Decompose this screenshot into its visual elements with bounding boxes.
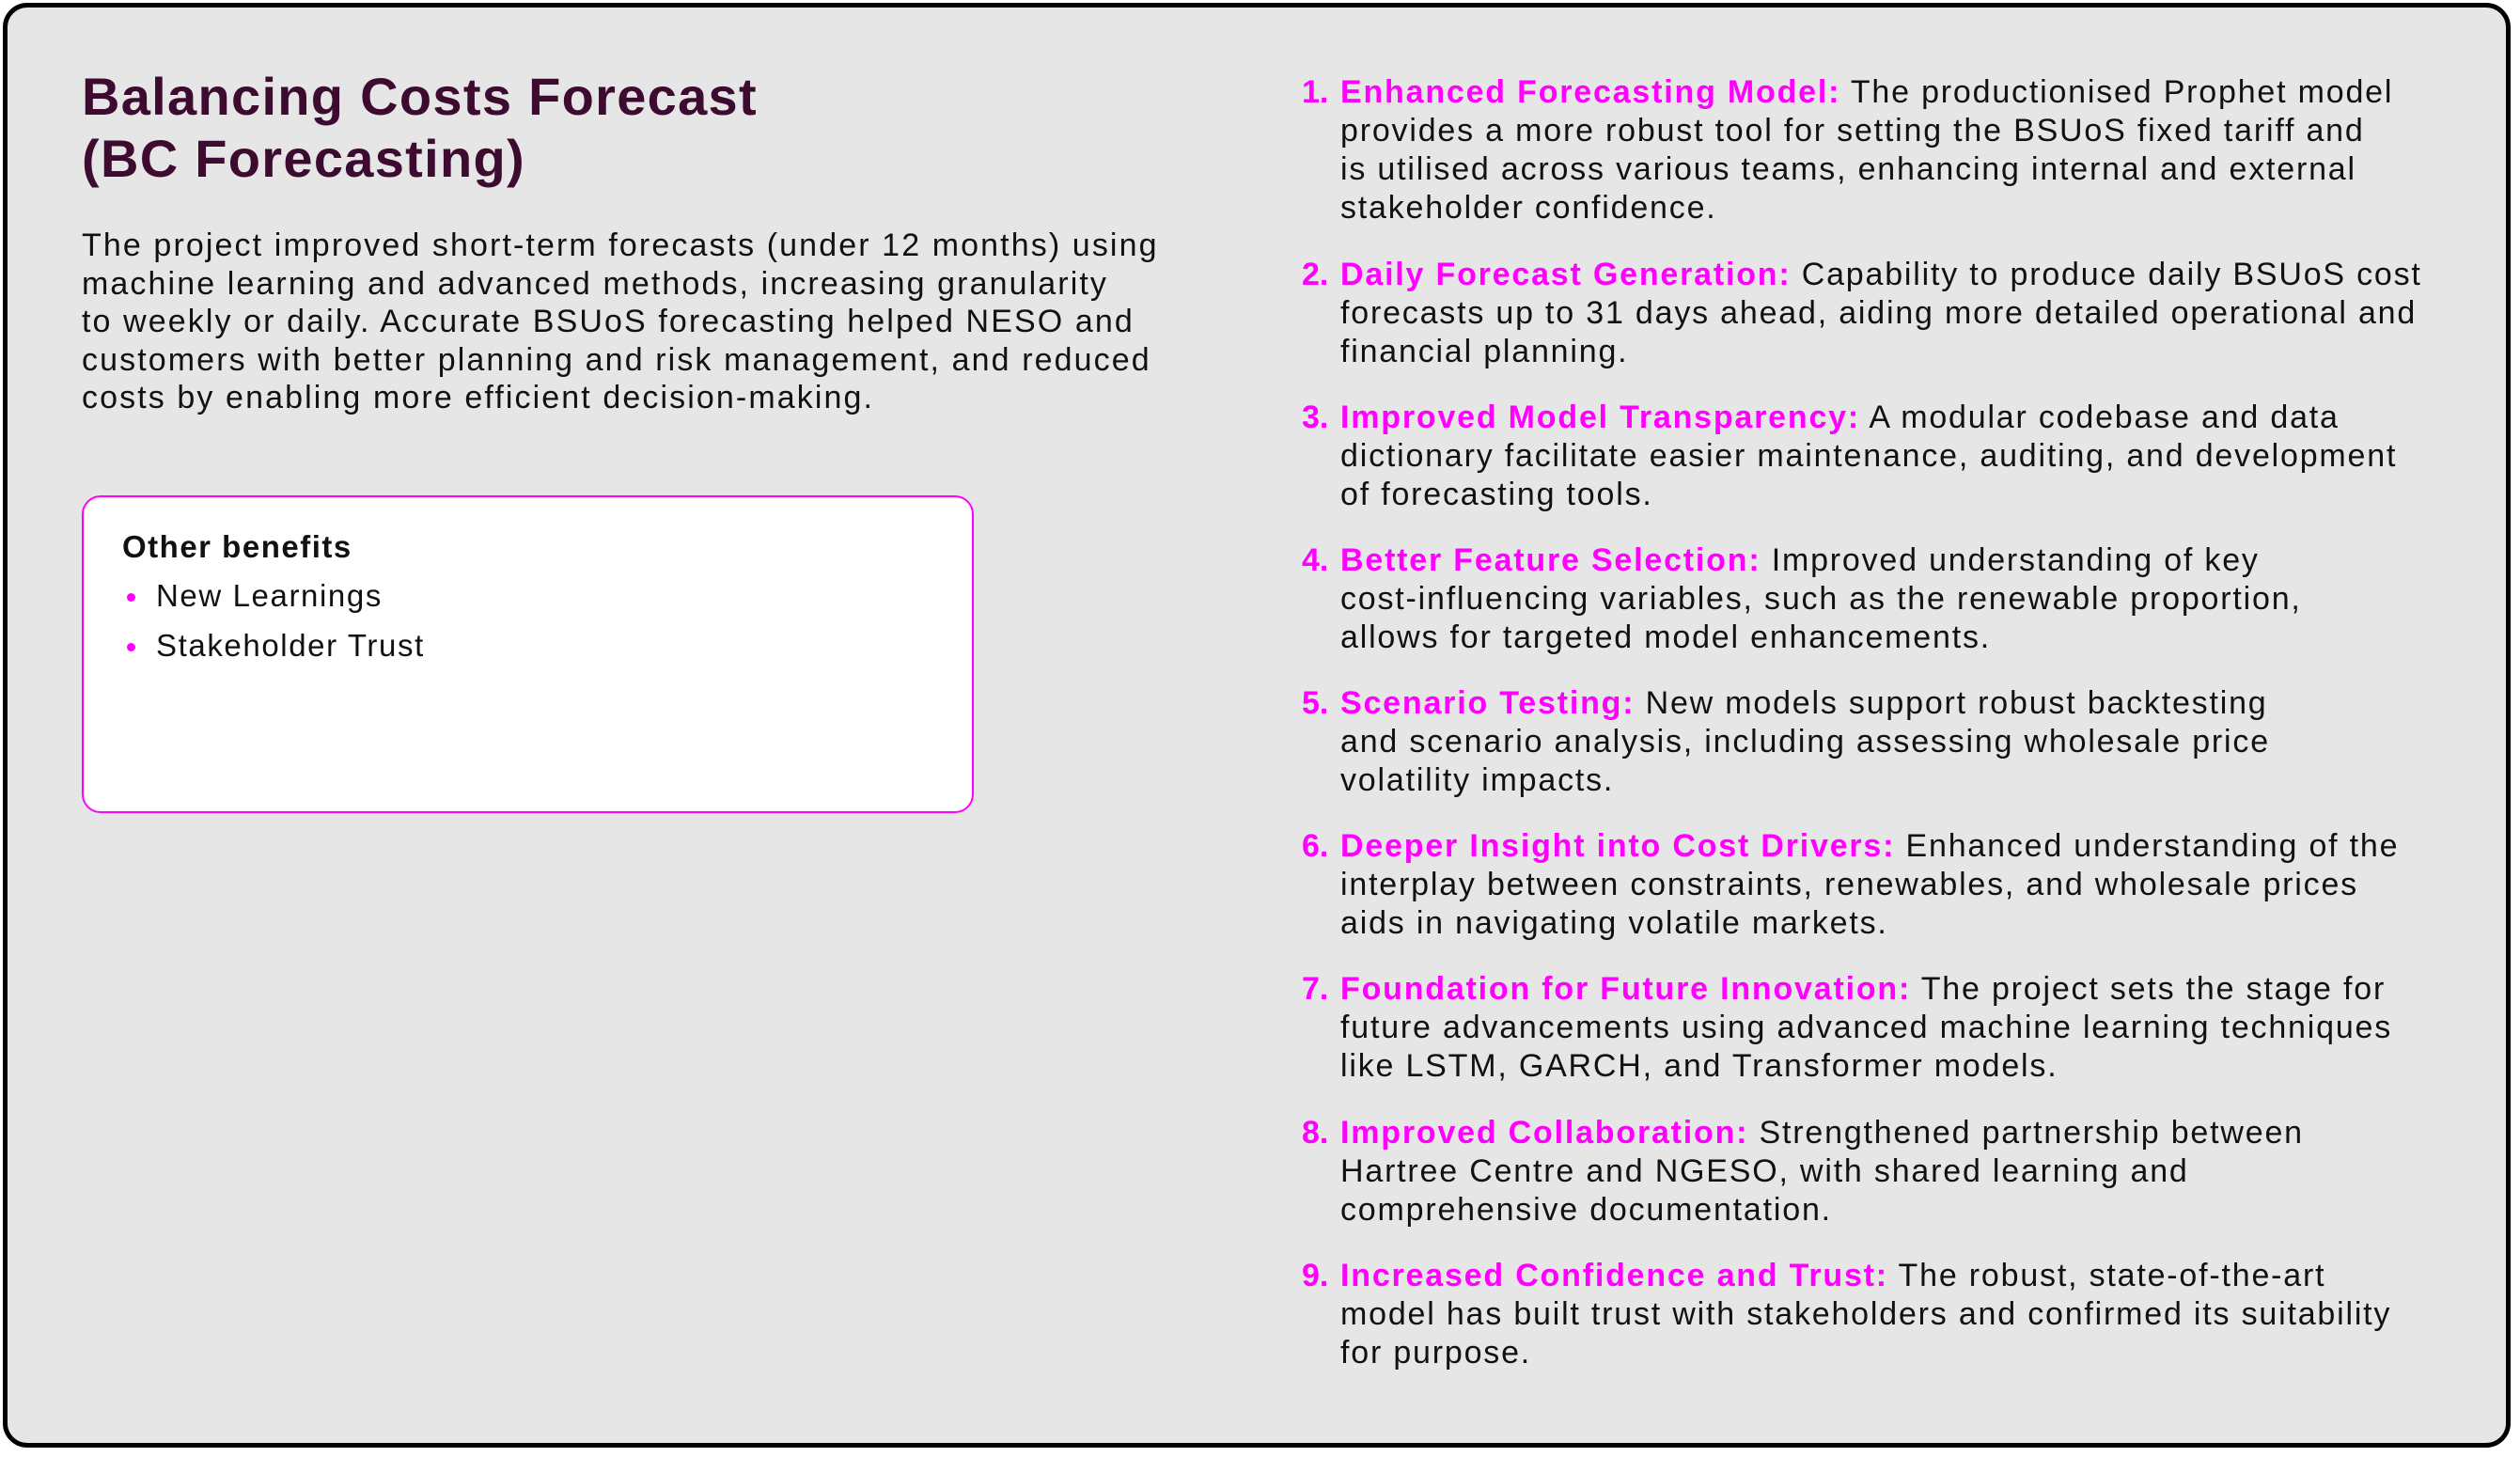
text: is utilised across various teams, enhancing internal and external — [1340, 151, 2356, 187]
text: Better Feature Selection: Improved understanding of key — [1340, 542, 2260, 578]
text: 9. — [1302, 1258, 1328, 1293]
text: 8. — [1302, 1115, 1328, 1151]
text: 1. — [1302, 74, 1328, 110]
text: Foundation for Future Innovation: The project sets the stage for — [1340, 971, 2386, 1007]
text: interplay between constraints, renewables, and wholesale prices — [1340, 867, 2358, 902]
text: forecasts up to 31 days ahead, aiding more detailed operational and — [1340, 295, 2417, 331]
text: 2. — [1302, 257, 1328, 292]
title — [82, 67, 758, 188]
text: 7. — [1302, 971, 1328, 1007]
text: future advancements using advanced machine learning techniques — [1340, 1010, 2392, 1045]
text: aids in navigating volatile markets. — [1340, 905, 1888, 941]
text: Daily Forecast Generation: Capability to produce daily BSUoS cost — [1340, 257, 2422, 292]
text: like LSTM, GARCH, and Transformer models. — [1340, 1048, 2058, 1084]
list item 3 — [1302, 400, 2397, 512]
heading: other benefits: Other benefits — [122, 529, 352, 564]
text: Scenario Testing: New models support robust backtesting — [1340, 685, 2268, 721]
text block: intro: to weekly or daily. Accurate BSUoS forecasting helped NESO and — [82, 304, 1135, 339]
bullet: new learnings: New Learnings — [156, 578, 383, 613]
list item 4 — [1302, 542, 2302, 655]
text: cost-influencing variables, such as the renewable proportion, — [1340, 581, 2302, 617]
text: 4. — [1302, 542, 1328, 578]
text: and scenario analysis, including assessing wholesale price — [1340, 724, 2270, 760]
text: volatility impacts. — [1340, 762, 1614, 798]
bullet: stakeholder trust: Stakeholder Trust — [156, 628, 425, 663]
text: comprehensive documentation. — [1340, 1192, 1832, 1228]
list item 5 — [1302, 685, 2270, 798]
text block: intro: customers with better planning and risk management, and reduced — [82, 342, 1151, 378]
list item 6 — [1302, 828, 2399, 941]
text: for purpose. — [1340, 1335, 1531, 1371]
text block: intro: The project improved short-term forecasts (under 12 months) using — [82, 227, 1159, 263]
panel: other benefits — [82, 495, 974, 813]
title: (BC Forecasting) — [82, 129, 525, 188]
text block: intro: costs by enabling more efficient decision-making. — [82, 380, 874, 415]
text: dictionary facilitate easier maintenance, auditing, and development — [1340, 438, 2397, 474]
text block: intro — [82, 227, 1159, 415]
text: provides a more robust tool for setting the BSUoS fixed tariff and — [1340, 113, 2365, 149]
text: Improved Collaboration: Strengthened partnership between — [1340, 1115, 2304, 1151]
text: of forecasting tools. — [1340, 477, 1653, 512]
list item 2 — [1302, 257, 2422, 369]
text: model has built trust with stakeholders and confirmed its suitability — [1340, 1296, 2391, 1332]
text: allows for targeted model enhancements. — [1340, 619, 1991, 655]
text: 6. — [1302, 828, 1328, 864]
text: Hartree Centre and NGESO, with shared learning and — [1340, 1153, 2189, 1189]
list item 9 — [1302, 1258, 2391, 1371]
text: Increased Confidence and Trust: The robust, state-of-the-art — [1340, 1258, 2325, 1293]
text: financial planning. — [1340, 334, 1628, 369]
text: Deeper Insight into Cost Drivers: Enhanced understanding of the — [1340, 828, 2399, 864]
text: stakeholder confidence. — [1340, 190, 1717, 226]
title: Balancing Costs Forecast — [82, 67, 758, 126]
list item 1 — [1302, 74, 2393, 226]
text: 3. — [1302, 400, 1328, 435]
text: Improved Model Transparency: A modular codebase and data — [1340, 400, 2340, 435]
text: 5. — [1302, 685, 1328, 721]
text: Enhanced Forecasting Model: The productionised Prophet model — [1340, 74, 2393, 110]
list item 7 — [1302, 971, 2392, 1084]
list item 8 — [1302, 1115, 2304, 1228]
text block: intro: machine learning and advanced methods, increasing granularity — [82, 265, 1108, 301]
